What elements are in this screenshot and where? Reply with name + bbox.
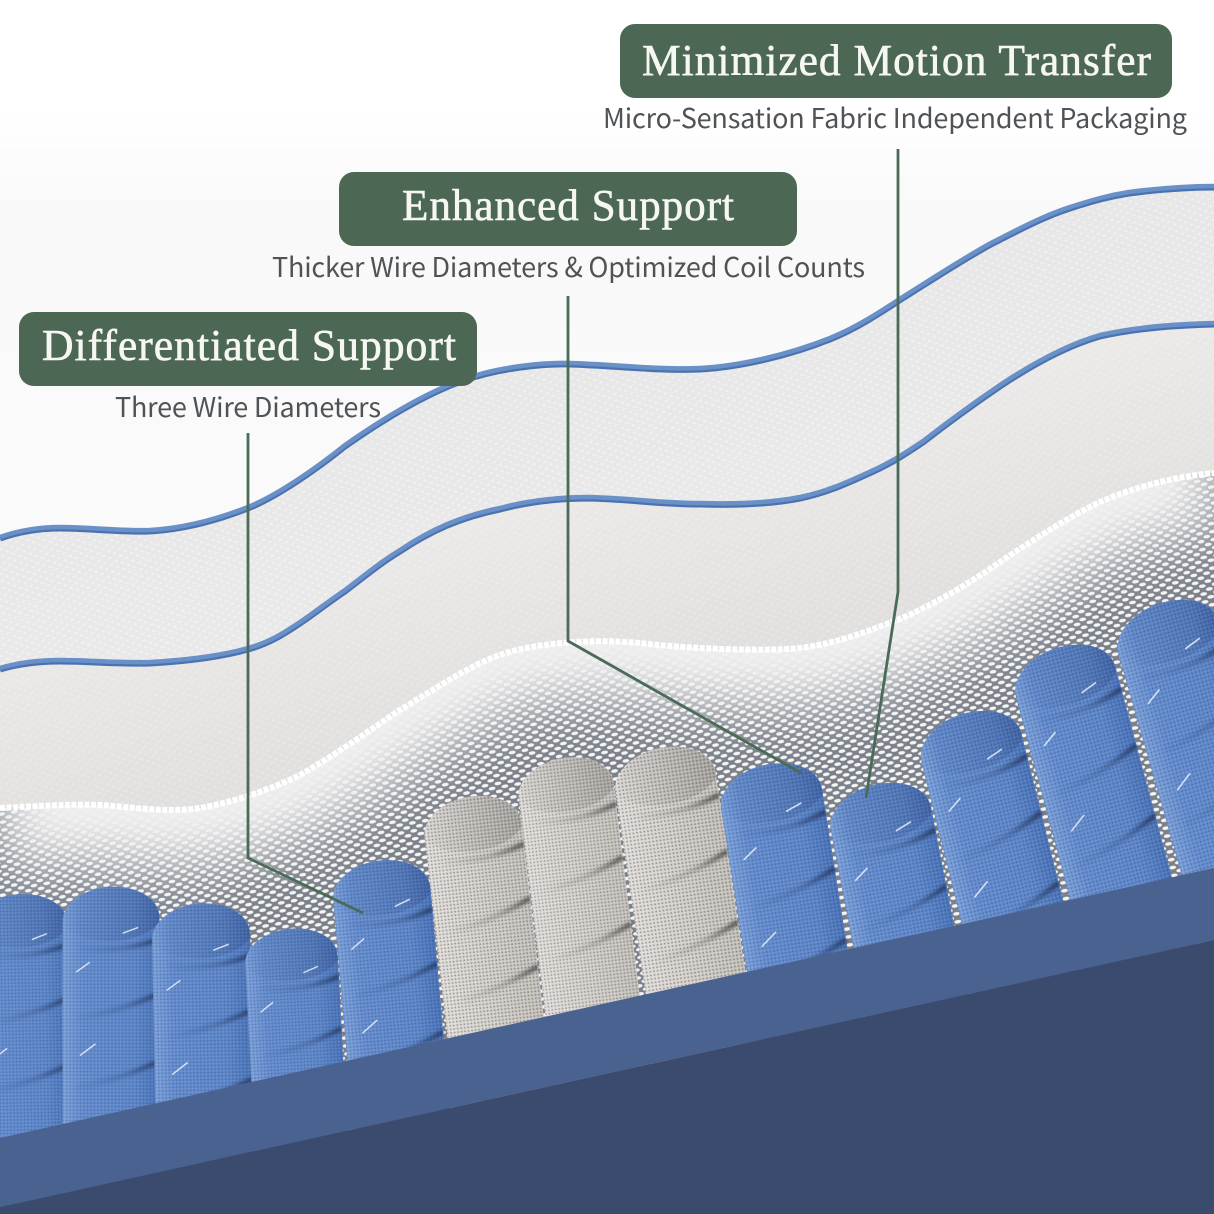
- coil 12: blue: [1006, 634, 1205, 1027]
- leader line: minimized motion transfer: [866, 149, 898, 798]
- blue edge: upper layer: [0, 186, 1214, 538]
- heading: Minimized Motion Transfer: [642, 36, 1152, 85]
- callout: minimized motion transfer: [603, 24, 1187, 136]
- heading pill: [620, 24, 1172, 98]
- coil 11: blue: [913, 701, 1105, 1094]
- coil 3: blue: [152, 903, 256, 1214]
- coil 8: gray: [610, 740, 766, 1123]
- coil 7: gray: [515, 752, 652, 1111]
- leader line: differentiated support: [248, 433, 363, 913]
- subheading: Micro-Sensation Fabric Independent Packaging: [603, 97, 1187, 136]
- heading pill: [339, 172, 797, 246]
- callout: enhanced support: [272, 172, 865, 285]
- wave layer: white mesh over the coils: [0, 473, 1214, 1100]
- heading pill: [19, 312, 477, 386]
- coil 9: blue: [715, 757, 876, 1143]
- coil 2: blue: [62, 887, 160, 1214]
- mattress base: [0, 868, 1214, 1214]
- heading: Enhanced Support: [402, 181, 735, 230]
- blue edge: middle layer: [0, 323, 1214, 670]
- leader line: enhanced support: [568, 296, 801, 773]
- base front face: [0, 940, 1214, 1214]
- wave layer: upper comfort fabric: [0, 186, 1214, 800]
- coil 1: blue: [0, 893, 73, 1214]
- wave layer: middle comfort fabric: [0, 323, 1214, 900]
- coil 13: blue: [1108, 589, 1214, 989]
- subheading: Thicker Wire Diameters & Optimized Coil Counts: [272, 246, 865, 285]
- coil 5: blue: [330, 856, 459, 1214]
- heading: Differentiated Support: [42, 321, 457, 370]
- coil 4: blue: [243, 926, 354, 1214]
- base top face: [0, 868, 1214, 1207]
- coil 10: blue: [824, 775, 996, 1163]
- pocket coil row: [0, 589, 1214, 1214]
- callout: differentiated support: [19, 312, 477, 425]
- coil 6: gray: [421, 791, 558, 1157]
- subheading: Three Wire Diameters: [115, 386, 381, 425]
